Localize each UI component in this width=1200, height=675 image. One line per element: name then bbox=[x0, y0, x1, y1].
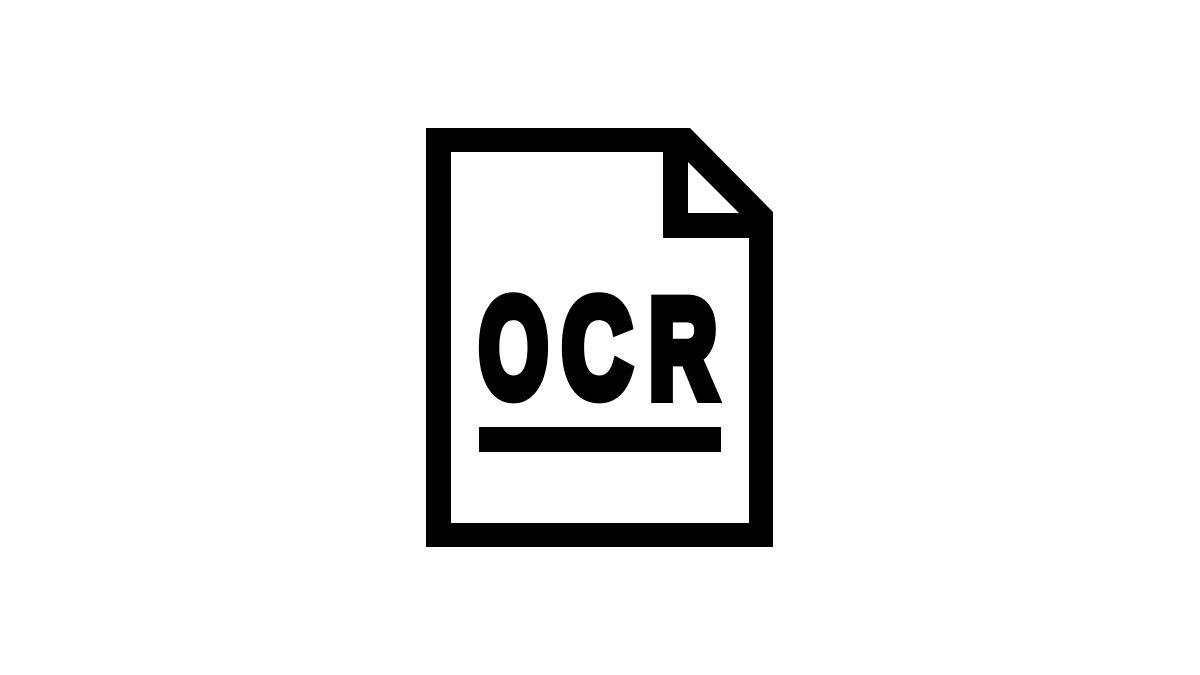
OCR label bbox=[479, 269, 717, 428]
OCR label: R bbox=[649, 271, 717, 428]
document outline with cut corner bbox=[426, 128, 773, 547]
underline bar bbox=[479, 427, 721, 452]
OCR label: C bbox=[562, 270, 632, 426]
OCR label: O bbox=[479, 269, 548, 426]
